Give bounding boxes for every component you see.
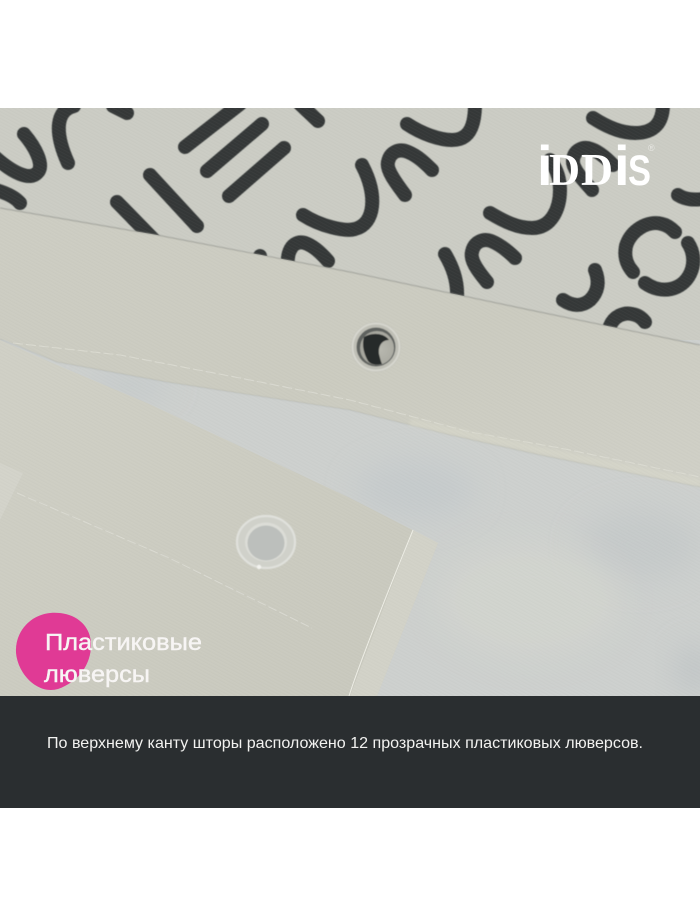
fold shadow line	[0, 208, 700, 345]
heading: люверсы	[44, 661, 150, 687]
logo: iDDiS: D	[581, 145, 613, 195]
fabric: blue-grey reverse side	[0, 340, 700, 696]
infographic page	[0, 108, 700, 808]
pink accent blob	[16, 613, 91, 690]
top seam stitching	[13, 343, 700, 477]
logo: iDDiS	[537, 134, 655, 197]
hem shadow	[0, 339, 700, 487]
dark caption band	[0, 696, 700, 808]
logo: iDDiS: S	[628, 147, 651, 195]
caption text: По верхнему канту шторы расположено 12 прозрачных пластиковых люверсов.	[47, 735, 643, 752]
lower seam stitching	[17, 493, 312, 628]
side hem fold	[350, 530, 438, 696]
side stitching	[349, 530, 413, 696]
logo: iDDiS: D	[549, 145, 580, 195]
registered mark: ®	[648, 143, 655, 153]
fabric: printed curtain face	[0, 108, 700, 340]
lower curtain hem panel	[0, 340, 438, 696]
top curtain hem panel	[0, 208, 700, 487]
hem wrinkles	[410, 422, 700, 483]
product photo: curtain fabric	[0, 104, 700, 696]
icon: clear plastic lower grommet	[236, 515, 296, 569]
folded corner highlight	[0, 463, 23, 520]
logo: iDDiS: i	[537, 134, 553, 197]
printed dark line pattern	[0, 104, 700, 326]
icon: dark-seen top grommet	[351, 322, 401, 372]
heading: Пластиковые	[45, 629, 202, 655]
logo: iDDiS: i	[614, 134, 630, 197]
fabric weave texture	[0, 108, 700, 696]
